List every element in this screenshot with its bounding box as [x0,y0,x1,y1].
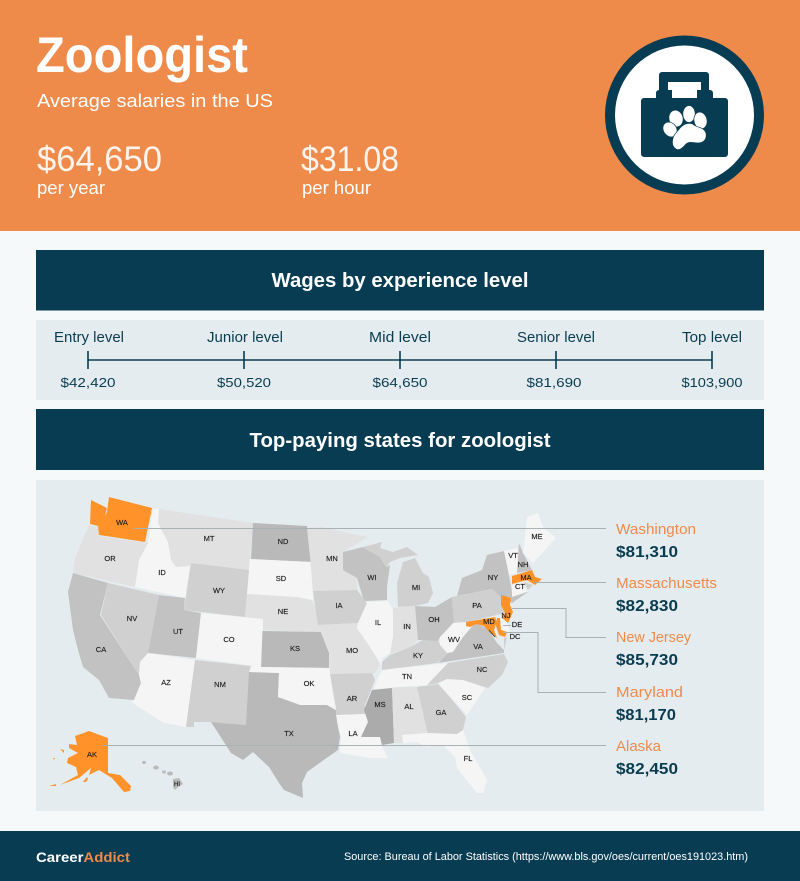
state labels: FL [464,754,472,763]
banner: top-paying states: Top-paying states for zoologist [250,430,551,452]
yearly salary: $64,650 [37,140,162,179]
callout: Massachusetts: Massachusetts [616,575,717,592]
banner: wages by experience level: Wages by experience level [272,270,528,292]
state labels: KY [413,651,423,660]
panel: experience timeline [36,320,764,400]
state: Hawaii [142,761,183,790]
state labels: DC [510,632,521,641]
callout: Washington [616,521,696,561]
senior level: Senior level [517,330,595,346]
title: Zoologist [36,27,248,83]
state labels: AR [347,694,358,703]
state labels [87,518,543,788]
icon: vet case with paw [605,36,764,194]
state labels: UT [173,627,183,636]
senior level [517,330,595,390]
state labels: OK [304,679,314,688]
callout: Alaska: $82,450 [616,761,678,778]
yearly salary [37,140,162,198]
state labels: PA [472,601,482,610]
state labels: GA [436,708,446,717]
state labels: VA [473,642,483,651]
state labels: NV [127,614,137,623]
banner: wages by experience level [36,250,764,310]
senior level: $81,690 [526,375,582,390]
hourly salary [301,140,399,198]
source: Source: Bureau of Labor Statistics (https://www.bls.gov/oes/current/oes191023.htm) [344,851,748,863]
logo: Career Addict [36,850,131,865]
state labels: NY [488,573,498,582]
state labels: MD [483,617,495,626]
callout: Massachusetts: $82,830 [616,598,678,615]
state labels: AZ [161,678,171,687]
state labels: CT [515,582,525,591]
state labels: ND [278,537,289,546]
state labels: NC [477,665,488,674]
state labels: SD [276,574,287,583]
mid level: Mid level [369,330,431,346]
junior level: Junior level [207,330,283,346]
leader lines [104,528,606,746]
yearly salary: per year [37,178,105,198]
highlighted state: Washington [90,497,152,542]
highlighted state: New Jersey [501,595,513,623]
callout: Maryland: Maryland [616,684,683,701]
entry level: Entry level [54,330,124,346]
state labels: OR [104,554,116,563]
state labels: AL [404,702,414,711]
state labels: IN [403,622,411,631]
subtitle: Average salaries in the US [37,91,273,111]
state labels: MT [204,534,215,543]
state labels: IL [375,618,381,627]
hourly salary: per hour [302,178,371,198]
state labels: DE [512,620,522,629]
state labels: CA [96,645,106,654]
state labels: WY [213,586,225,595]
state labels: OH [428,615,440,624]
callout: Massachusetts [616,575,717,615]
callout: Maryland: $81,170 [616,707,676,724]
callout: Alaska: Alaska [616,738,662,755]
panel: header [0,0,800,231]
state labels: MS [374,700,386,709]
state labels: MN [326,554,338,563]
callout: Maryland [616,684,683,724]
chart: US state map [49,497,556,798]
state labels: IA [335,601,343,610]
state labels: HI [174,782,180,788]
highlighted state: Alaska [49,731,131,792]
panel: map background [36,480,764,811]
state labels: KS [290,644,300,653]
state labels: LA [348,729,358,738]
highlighted state: Massachusetts [512,570,542,585]
state labels: NE [278,607,288,616]
mid level [369,330,431,390]
state labels: NJ [501,611,511,620]
state labels: VT [508,551,518,560]
banner: top-paying states [36,409,764,470]
state labels: TX [284,729,294,738]
state labels: WV [448,635,460,644]
entry level: $42,420 [60,375,116,390]
state labels: ID [158,568,166,577]
state labels: NH [518,560,528,569]
state labels: WA [116,518,128,527]
junior level: $50,520 [217,375,271,390]
top level: Top level [682,330,742,346]
state labels: ME [531,532,543,541]
highlighted state: Maryland [466,617,507,638]
state labels: TN [402,672,412,681]
state labels: AK [87,750,97,759]
state labels: WI [367,573,377,582]
callout: New Jersey: $85,730 [616,652,678,669]
callout: Washington: $81,310 [616,544,678,561]
callout: Washington: Washington [616,521,696,538]
callout: New Jersey [616,629,691,669]
callout: New Jersey: New Jersey [616,629,691,646]
panel: footer [0,831,800,881]
callout: Alaska [616,738,678,778]
top level: $103,900 [682,375,742,390]
junior level [207,330,283,390]
hourly salary: $31.08 [301,140,399,179]
state labels: CO [223,635,235,644]
mid level: $64,650 [372,375,428,390]
state labels: NM [214,680,226,689]
entry level [54,330,124,390]
state labels: MA [520,573,532,582]
state labels: SC [462,693,473,702]
top level [682,330,742,390]
state labels: MI [412,583,420,592]
state labels: MO [346,646,358,655]
